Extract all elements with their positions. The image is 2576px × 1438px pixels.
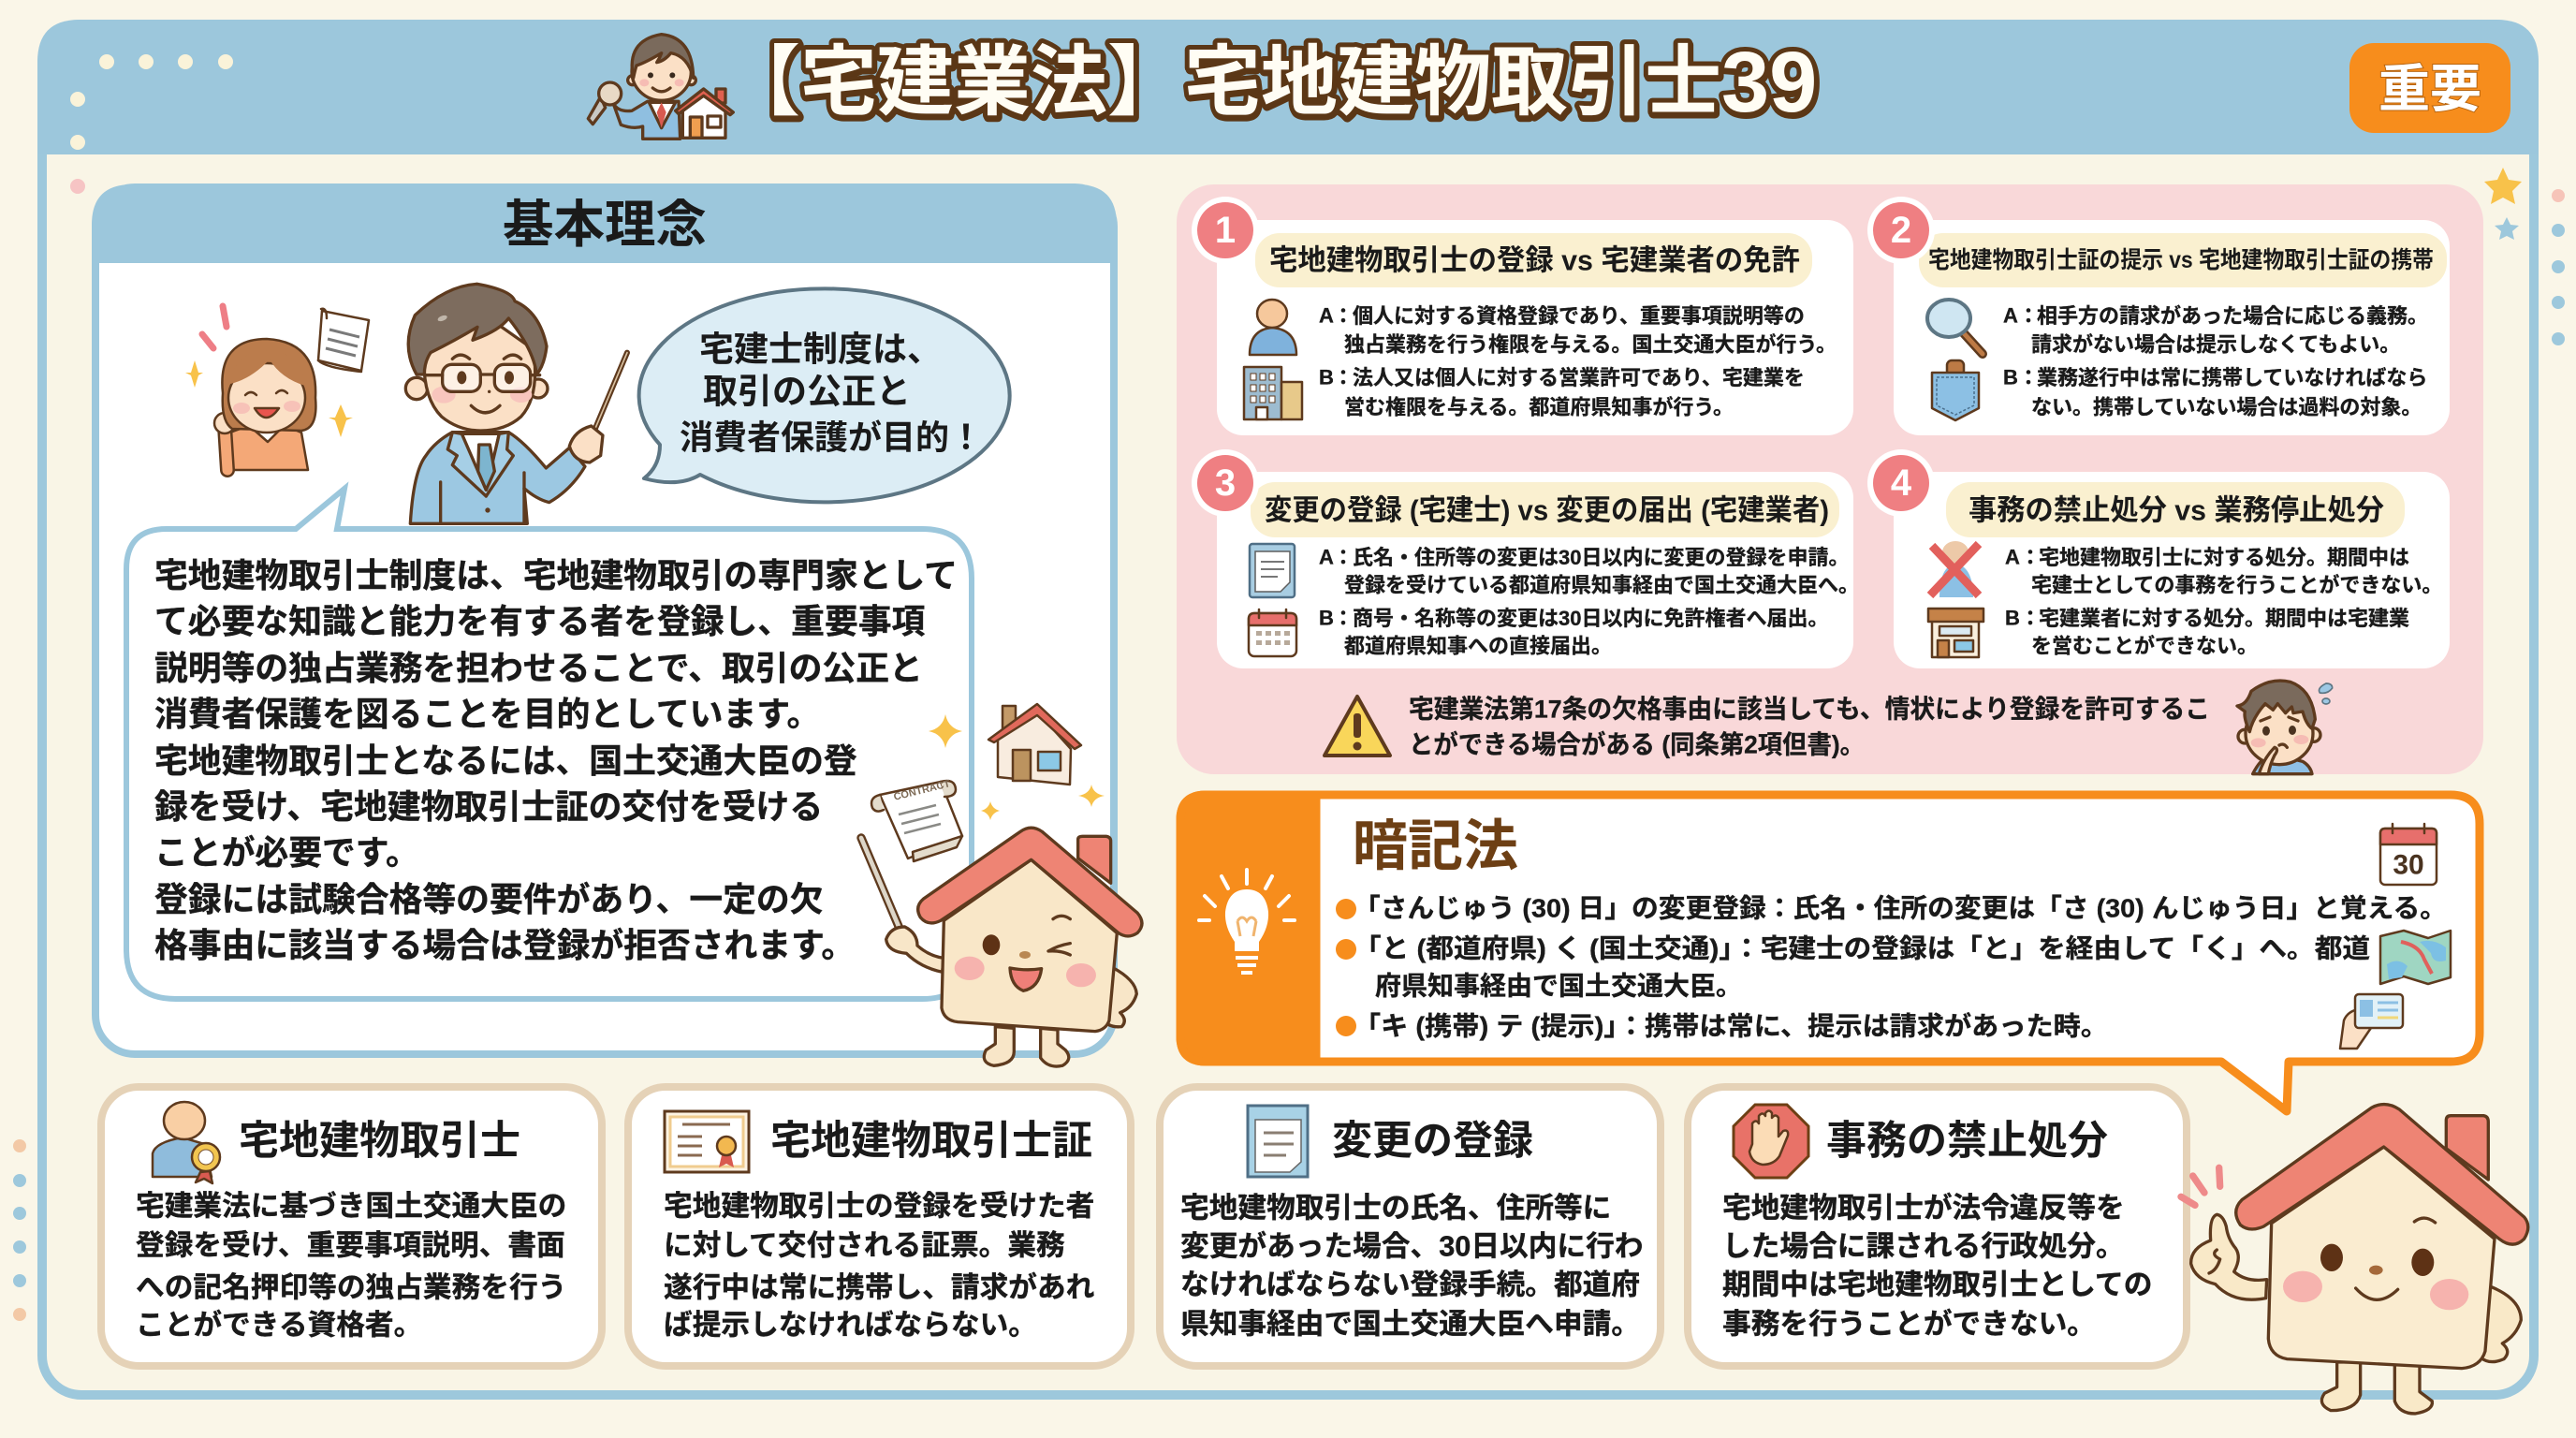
mnemonic list: 「キ (携帯) テ (提示)」：携帯は常に、提示は請求があった時。 [1354,1011,2108,1041]
icon: document [1250,544,1295,597]
card: registered agent: 登録を受け、重要事項説明、書面 [136,1228,565,1262]
card 1: ： [1333,365,1354,389]
mascot: house pointing up [2181,1105,2528,1414]
card 3: A [1319,545,1334,569]
speech bubble: teacher: 取引の公正と [703,373,911,410]
icon: hand with ID card [2340,994,2403,1049]
text box: explanation: ことが必要です。 [154,834,419,872]
card 1: A [1319,303,1334,328]
mascot: winking house with pointer [861,828,1142,1066]
card 4: 宅建士としての事務を行うことができない。 [2031,573,2442,597]
side decoration dots and stars [13,168,2565,1321]
card 2: 請求がない場合は提示しなくてもよい。 [2031,333,2400,356]
card 3: 登録を受けている都道府県知事経由で国土交通大臣へ。 [1344,573,1859,597]
illustration: worried boy [2237,681,2333,774]
icon: calendar 30: 30 [2393,850,2424,880]
card: change of registration: 変更の登録 [1332,1119,1533,1164]
card: registered agent: 宅地建物取引士 [239,1119,520,1164]
text box: explanation: 消費者保護を図ることを目的としています。 [154,696,820,733]
card 2: ： [2018,303,2039,328]
mnemonic list: 「さんじゅう (30) 日」の変更登録：氏名・住所の変更は「さ (30) んじゅう日」と覚える。 [1354,893,2447,923]
card: agent license [628,1087,1131,1366]
card 4: B [2005,607,2020,629]
text box: explanation: 宅地建物取引士となるには、国土交通大臣の登 [154,742,857,780]
speech bubble: teacher [639,288,1010,502]
warning note: 宅建業法第17条の欠格事由に該当しても、情状により登録を許可するこ [1409,695,2210,723]
warning note [1325,681,2333,774]
title: 【宅建業法】宅地建物取引士39 [724,35,1817,130]
card 2: ない。携帯していない場合は過料の対象。 [2031,395,2422,419]
icon: person [1250,300,1296,355]
card 2: 2 [1891,210,1911,251]
panel background with speech tail [1180,795,2480,1111]
card 4: A [2005,545,2020,569]
card 1: 1 [1215,210,1236,251]
badge: important: 重要 [2378,60,2481,118]
text box: explanation: 宅地建物取引士制度は、宅地建物取引の専門家として [154,557,958,594]
heading: basic philosophy: 基本理念 [503,197,707,253]
icon: warning triangle [1325,697,1390,756]
card 4: を営むことができない。 [2031,635,2258,657]
card 4: ： [2020,607,2041,629]
card 1: B [1319,365,1334,389]
card: prohibition of duties: 事務の禁止処分 [1826,1119,2108,1164]
card: prohibition of duties: 期間中は宅地建物取引士としての [1722,1268,2152,1301]
card 3: 変更の登録 (宅建士) vs 変更の届出 (宅建業者) [1265,494,1829,526]
card 3: 氏名・住所等の変更は30日以内に変更の登録を申請。 [1353,545,1849,569]
card 1: 個人に対する資格登録であり、重要事項説明等の [1353,303,1805,328]
text box: explanation: 説明等の独占業務を担わせることで、取引の公正と [154,650,923,687]
icon: person with medal [153,1102,220,1183]
card: registered agent: ことができる資格者。 [136,1309,422,1341]
text box: explanation: 録を受け、宅地建物取引士証の交付を受ける [154,788,823,826]
card 4: 宅地建物取引士に対する処分。期間中は [2039,545,2409,569]
panel: basic philosophy [92,184,1142,1066]
icon: stop hand [1734,1105,1808,1178]
card 4: ： [2020,545,2041,569]
badge: important [2349,43,2510,133]
card 1: 法人又は個人に対する営業許可であり、宅建業を [1353,365,1805,389]
icon: header man with key and house [588,35,733,139]
card: change of registration: 県知事経由で国土交通大臣へ申請。 [1180,1307,1640,1341]
card: prohibition of duties: した場合に課される行政処分。 [1722,1230,2125,1262]
mnemonic list [1336,893,2447,1041]
warning note: とができる場合がある (同条第2項但書)。 [1409,730,1865,758]
speech bubble: teacher: 宅建士制度は、 [699,330,942,369]
icon: shop [1928,609,1983,657]
icon: prohibited [1930,541,1979,597]
card: change of registration: なければならない登録手続。都道府 [1180,1268,1640,1301]
icon: shirt pocket [1932,360,1979,420]
text box: explanation: 登録には試験合格等の要件があり、一定の欠 [154,881,824,918]
card 2: ： [2018,365,2039,389]
card 2 [1867,197,2450,435]
sparkles [929,714,1105,820]
panel: comparison cards [1177,184,2483,774]
header band [37,20,2539,154]
card 4: 宅建業者に対する処分。期間中は宅建業 [2039,607,2409,629]
text box: explanation [126,489,972,999]
icon: form document [1248,1106,1308,1177]
card 1: ： [1333,303,1354,328]
card 1: 宅地建物取引士の登録 vs 宅建業者の免許 [1269,243,1800,277]
card: change of registration: 宅地建物取引士の氏名、住所等に [1180,1191,1611,1225]
illustration: teacher with pointer [405,284,627,523]
card 3: B [1319,607,1334,629]
card: agent license: ば提示しなければならない。 [664,1309,1037,1341]
panel background [92,184,1117,1054]
icon: small house [988,704,1081,785]
illustration: cheerful woman with scroll [185,306,369,470]
icon: magnifier [1927,300,1983,354]
icon: light bulb [1199,870,1295,975]
card: agent license: 遂行中は常に携帯し、請求があれ [664,1271,1094,1303]
card 3 [1192,449,1859,668]
card 1 [1192,197,1853,435]
text box: explanation: て必要な知識と能力を有する者を登録し、重要事項 [154,603,926,640]
icon: contract scroll: CONTRACT [893,778,952,803]
card: agent license: 宅地建物取引士証 [770,1119,1092,1164]
card 2: 宅地建物取引士証の提示 vs 宅地建物取引士証の携帯 [1928,247,2434,273]
heading: mnemonics: 暗記法 [1353,815,1518,877]
mnemonic list: 「と (都道府県) く (国土交通)」：宅建士の登録は「と」を経由して「く」へ。都道 [1354,934,2370,962]
card: prohibition of duties: 事務を行うことができない。 [1722,1307,2096,1341]
mnemonic list: 府県知事経由で国土交通大臣。 [1375,972,1742,1000]
card 1: 営む権限を与える。都道府県知事が行う。 [1344,395,1734,419]
card: registered agent: への記名押印等の独占業務を行う [136,1271,566,1303]
icon: office building [1244,367,1302,419]
card 3: 都道府県知事への直接届出。 [1344,635,1612,657]
card 3: ： [1333,607,1354,629]
panel background [1177,184,2483,774]
card: change of registration [1160,1087,1661,1366]
card: change of registration: 変更があった場合、30日以内に行わ [1180,1230,1643,1262]
card: registered agent [101,1087,602,1366]
icon: calendar 30 [2380,824,2437,885]
card 3: 商号・名称等の変更は30日以内に免許権者へ届出。 [1353,607,1828,629]
text box: explanation: 格事由に該当する場合は登録が拒否されます。 [154,927,855,964]
panel: mnemonics [1180,795,2480,1111]
icon: calendar [1249,609,1296,656]
card: prohibition of duties: 宅地建物取引士が法令違反等を [1722,1191,2125,1225]
icon: contract scroll [871,778,962,861]
card 1: 独占業務を行う権限を与える。国土交通大臣が行う。 [1344,333,1837,356]
card 4: 事務の禁止処分 vs 業務停止処分 [1969,494,2384,526]
card 2: B [2003,365,2018,389]
card: agent license: に対して交付される証票。業務 [664,1228,1065,1262]
icon: map [2380,931,2451,984]
icon: certificate [665,1111,749,1172]
card 3: ： [1333,545,1354,569]
card 2: 相手方の請求があった場合に応じる義務。 [2037,303,2428,328]
speech bubble: teacher: 消費者保護が目的！ [680,418,983,457]
card: registered agent: 宅建業法に基づき国土交通大臣の [136,1189,566,1223]
card: prohibition of duties [1688,1087,2187,1366]
card 2: A [2003,303,2018,328]
card 4: 4 [1891,462,1912,504]
card 4 [1867,449,2450,668]
card: agent license: 宅地建物取引士の登録を受けた者 [664,1189,1094,1223]
card 2: 業務遂行中は常に携帯していなければなら [2037,365,2427,389]
card 3: 3 [1215,462,1236,504]
